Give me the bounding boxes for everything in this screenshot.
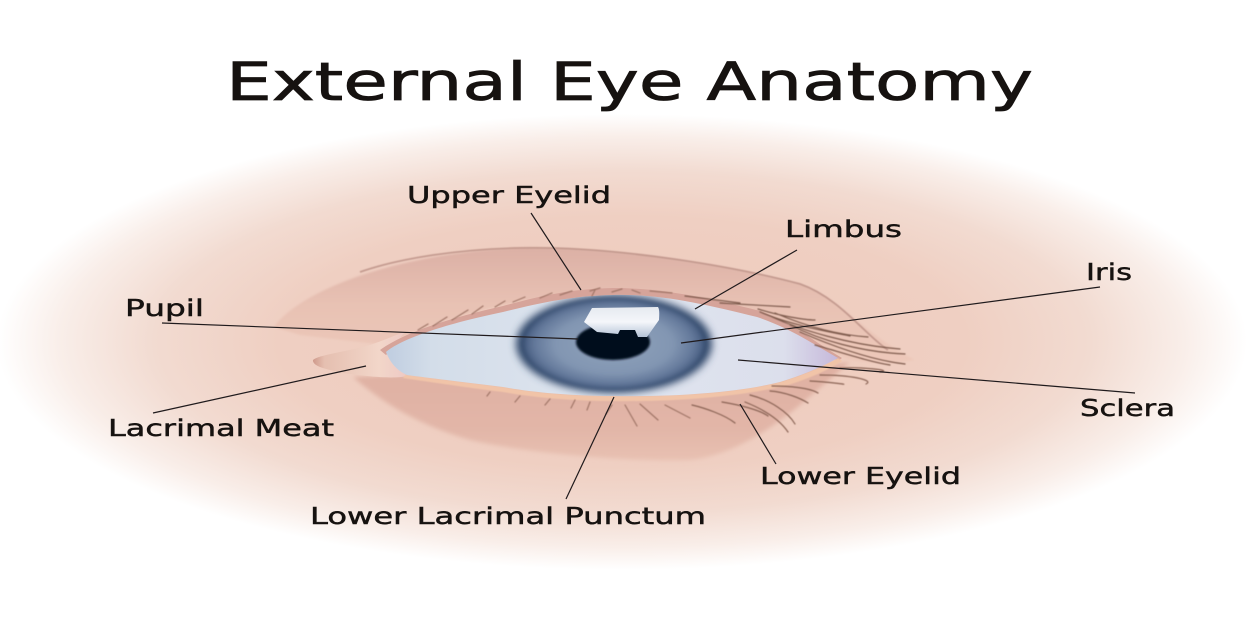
infographic: external eye anatomy diagram: [20, 60, 1224, 562]
leader: sclera: [738, 360, 1135, 393]
label: sclera: Sclera: [1080, 396, 1175, 422]
leader: lacrimal meat: [153, 366, 366, 413]
upper eyelid crease: [360, 248, 888, 350]
eyelashes: [418, 288, 905, 432]
label: lower lacrimal punctum: Lower Lacrimal Punctum: [310, 504, 706, 530]
leader: upper eyelid: [531, 213, 581, 290]
leader: iris: [681, 287, 1100, 343]
leader: lower eyelid: [740, 404, 776, 464]
leader: lower lacrimal punctum: [566, 397, 614, 499]
skin background: [0, 114, 1247, 570]
iris: [516, 295, 712, 393]
lower eyelid shadow: [353, 362, 850, 460]
upper eyelid fold: [274, 248, 915, 363]
label: upper eyelid: Upper Eyelid: [407, 183, 611, 209]
corneal highlight: [584, 307, 659, 337]
title: External Eye Anatomy: [226, 52, 1033, 113]
iris dark limbal ring: [516, 295, 712, 393]
pupil: [576, 324, 650, 360]
lower lid margin: [403, 358, 842, 401]
leader lines: [153, 213, 1135, 499]
sclera: [386, 295, 838, 396]
label: iris: Iris: [1086, 260, 1132, 286]
label: lower eyelid: Lower Eyelid: [760, 464, 961, 490]
label: lacrimal meat: Lacrimal Meat: [108, 416, 334, 442]
leader: limbus: [695, 250, 797, 309]
lower lashes: [487, 368, 884, 432]
upper lid margin: [380, 288, 842, 361]
upper lashes: [418, 288, 905, 365]
lacrimal meat: [313, 332, 407, 377]
leader: pupil: [162, 323, 578, 339]
label: pupil: Pupil: [125, 296, 204, 322]
label: limbus: Limbus: [785, 217, 902, 243]
